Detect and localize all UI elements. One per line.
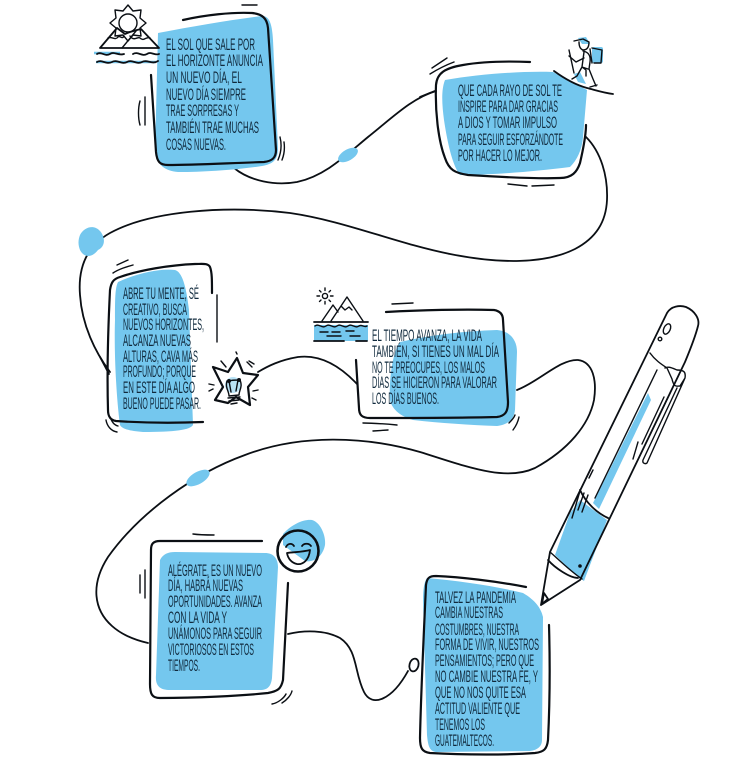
panel: rejoice message: VICTORIOSOS EN ESTOS xyxy=(168,641,254,659)
panel: open your mind message: NUEVOS HORIZONTES, xyxy=(123,316,204,334)
accent blob on curve 1 xyxy=(336,145,360,165)
accent blob on curve 2 xyxy=(78,227,104,256)
message text: TALVEZ LA PANDEMIA xyxy=(435,589,516,607)
message text xyxy=(435,589,539,750)
message text: QUE NO NOS QUITE ESA xyxy=(435,684,526,702)
sketch ticks xyxy=(106,260,217,432)
pen blue stripe xyxy=(593,393,651,509)
sketch outline xyxy=(436,62,586,178)
panel: gratitude message xyxy=(420,37,613,186)
panel: open your mind message: BUENO PUEDE PASAR. xyxy=(123,395,201,413)
panel: gratitude message: A DIOS Y TOMAR IMPULSO xyxy=(458,114,557,132)
panel: rejoice message: OPORTUNIDADES. AVANZA xyxy=(168,593,262,611)
blue note shape xyxy=(115,270,193,432)
accent blob on curve 4 xyxy=(184,466,212,490)
sketch ticks xyxy=(140,534,292,704)
panel: rejoice message: UNÁMONOS PARA SEGUIR xyxy=(168,624,262,643)
panel: open your mind message: ABRE TU MENTE, SÉ xyxy=(123,284,199,303)
panel: time moves on message: DÍAS SE HICIERON PARA VALORAR xyxy=(372,373,497,392)
sketch outline xyxy=(420,576,550,754)
message text xyxy=(123,284,204,413)
panel: open your mind message: ALTURAS, CAVA MÁS xyxy=(123,347,198,366)
blue note shape xyxy=(442,72,587,175)
message text: DÍA, HABRÁ NUEVAS xyxy=(168,576,243,595)
connector curve: box 5 to box 6 xyxy=(288,631,408,700)
blue note shape xyxy=(423,578,543,752)
message text: EN ESTE DÍA ALGO xyxy=(123,378,195,397)
icon: sun over mountain and sea xyxy=(94,5,159,63)
message text: ACTITUD VALIENTE QUE xyxy=(435,700,520,718)
message text: UN NUEVO DÍA, EL xyxy=(166,68,242,87)
sketch outline xyxy=(150,541,288,698)
panel: open your mind message xyxy=(100,260,258,432)
connector end circle xyxy=(408,658,420,672)
panel: sunrise message: TAMBIÉN TRAE MUCHAS xyxy=(166,118,259,137)
sketch ticks xyxy=(138,5,284,160)
icon: sun, mountains and lake xyxy=(314,288,368,341)
text: FORMA DE VIVIR, NUESTROS xyxy=(435,636,539,654)
message text xyxy=(458,82,563,165)
message text: ALCANZA NUEVAS xyxy=(123,332,191,350)
pen outline xyxy=(541,306,698,605)
message text: CREATIVO, BUSCA xyxy=(123,301,187,319)
message text: POR HACER LO MEJOR. xyxy=(458,147,542,165)
sketch ticks xyxy=(430,58,554,186)
illustration: pen xyxy=(541,306,698,605)
panel: gratitude message: PARA SEGUIR ESFORZÁNDOTE xyxy=(458,130,563,149)
message text xyxy=(372,327,499,408)
message text: COSTUMBRES, NUESTRA xyxy=(435,621,519,639)
message text: TRAE SORPRESAS Y xyxy=(166,102,239,120)
icon: star light bulb xyxy=(209,352,258,405)
connector curve: box 1 to box 2 xyxy=(234,91,436,183)
message text: EL SOL QUE SALE POR xyxy=(166,36,255,54)
message text: TIEMPOS. xyxy=(168,657,200,675)
panel: sunrise message: EL HORIZONTE ANUNCIA xyxy=(166,52,263,70)
panel: sunrise message xyxy=(94,5,284,172)
left connector stub xyxy=(420,91,435,97)
blue note shape xyxy=(155,16,278,172)
message text: EL TIEMPO AVANZA, LA VIDA xyxy=(372,327,482,345)
connector curve: star to box 4 xyxy=(258,357,357,384)
sketch outline xyxy=(356,310,508,418)
panel: rejoice message: ALÉGRATE, ES UN NUEVO xyxy=(168,561,262,580)
blue note shape xyxy=(390,330,517,426)
panel: pandemic message: NO CAMBIE NUESTRA FE, Y xyxy=(435,668,538,686)
message text: LOS DÍAS BUENOS. xyxy=(372,389,439,408)
panel: gratitude message: QUE CADA RAYO DE SOL TE xyxy=(458,82,562,100)
blue note shape xyxy=(156,552,278,690)
message text: COSAS NUEVAS. xyxy=(166,136,226,154)
panel: pandemic message: PENSAMIENTOS; PERO QUE xyxy=(435,652,534,670)
panel: gratitude message: INSPIRE PARA DAR GRACIAS xyxy=(458,98,558,116)
sketch outline xyxy=(151,13,276,165)
icon: hiker on a hill xyxy=(554,37,613,94)
panel: pandemic message xyxy=(420,576,550,754)
sketch outline xyxy=(108,264,212,423)
sketch ticks xyxy=(363,303,519,431)
pen blue grip xyxy=(555,500,607,581)
message text: TENEMOS LOS xyxy=(435,716,485,734)
message text xyxy=(168,561,262,675)
panel: time moves on message: TAMBIÉN, SI TIENES UN MAL DÍA xyxy=(372,342,499,361)
pen details xyxy=(550,353,685,579)
panel: time moves on message: NO TE PREOCUPES, LOS MALOS xyxy=(372,359,485,377)
panel: time moves on message xyxy=(314,288,519,431)
message text xyxy=(166,36,263,154)
message text: GUATEMALTECOS. xyxy=(435,732,494,750)
panel: open your mind message: PROFUNDO; PORQUE xyxy=(123,363,196,381)
message text: CON LA VIDA Y xyxy=(168,609,227,627)
icon: laughing face xyxy=(278,520,325,572)
panel: rejoice message xyxy=(140,520,325,704)
message text: CAMBIA NUESTRAS xyxy=(435,604,503,622)
left connector stub xyxy=(100,357,109,374)
message text: NUEVO DÍA SIEMPRE xyxy=(166,85,246,104)
connector curve: box 2 to box 3 xyxy=(80,137,607,372)
connector curve: box 4 around pen to box 5 xyxy=(96,360,595,643)
